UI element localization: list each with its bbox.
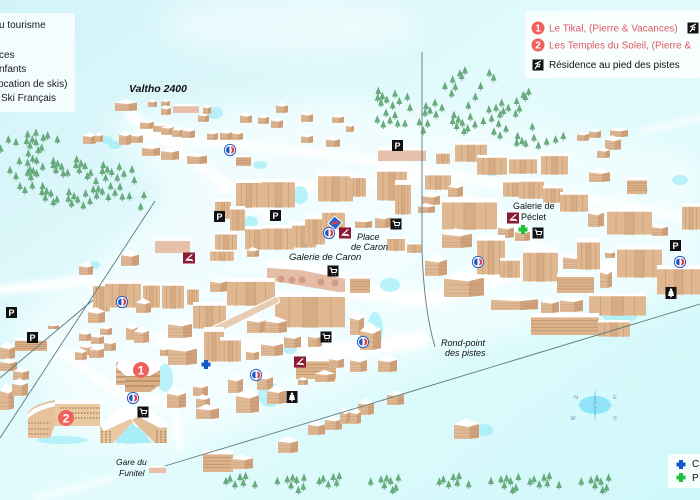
label: Galerie de Caron: Galerie de Caron <box>289 252 361 263</box>
parking icons: P <box>272 211 279 221</box>
cyan building shadows <box>37 107 688 444</box>
legend: crosses (bottom right): P <box>692 473 699 484</box>
legend: services (top left) <box>0 13 75 112</box>
compass rose: W <box>570 416 576 422</box>
buildings: Caron area <box>121 167 422 266</box>
compass rose: S <box>613 416 617 422</box>
ski runs and snow paths <box>0 115 700 498</box>
legend: residences (top right): 2 <box>535 40 541 52</box>
label: Place de Caron: de Caron <box>351 242 388 252</box>
parking icons: P <box>672 241 679 251</box>
legend: residences (top right) <box>525 11 700 78</box>
legend: crosses (bottom right) <box>668 454 700 488</box>
label: Gare du Funitel: Gare du <box>116 457 147 467</box>
walker icons <box>286 287 676 403</box>
marker 2 <box>58 410 74 426</box>
parking icons: P <box>394 141 401 151</box>
marker 2: 2 <box>63 412 70 426</box>
legend: residences (top right): Résidence au pied des pistes <box>549 60 680 71</box>
medical cross: blue <box>202 360 210 369</box>
label: Valtho 2400: Valtho 2400 <box>129 83 187 95</box>
parking icons: P <box>216 212 223 222</box>
parking icons <box>6 140 681 343</box>
compass rose <box>570 389 619 422</box>
parking icons: P <box>29 333 36 343</box>
tourist office icon <box>328 216 342 230</box>
label: Place de Caron: Place <box>357 232 380 242</box>
label: Rond-point des pistes: Rond-point <box>441 338 486 348</box>
marker 1 <box>133 362 149 378</box>
building: Galerie de Caron <box>267 258 345 293</box>
label: Galerie de Péclet: Galerie de <box>513 201 555 211</box>
compass rose: N <box>574 395 578 401</box>
legend: services (top left): Ski Français <box>1 93 56 104</box>
ski school icons <box>116 144 686 404</box>
pharmacy cross: green <box>518 225 528 234</box>
legend: services (top left): u tourisme <box>0 20 46 31</box>
marker 1: 1 <box>138 364 145 378</box>
conifer trees <box>0 66 612 495</box>
parking icons: P <box>8 308 15 318</box>
legend: crosses (bottom right): C <box>692 459 699 470</box>
buildings: central and south-west area <box>0 262 350 473</box>
shopping cart icons <box>138 218 544 418</box>
residence 2: Les Temples du Soleil building <box>28 400 168 443</box>
legend: services (top left): ocation de skis) <box>0 79 67 90</box>
legend: residences (top right): Les Temples du Soleil, (Pierre & <box>549 40 691 52</box>
residence 1: Le Tikal building <box>116 360 160 392</box>
legend: residences (top right): 1 <box>535 24 541 34</box>
buildings: Val Thorens 2400 area <box>83 99 354 166</box>
legend: residences (top right): Le Tikal, (Pierre & Vacances) <box>549 24 678 34</box>
buildings: Péclet and eastern area <box>350 127 700 439</box>
ski rental icons <box>183 212 519 368</box>
label: Rond-point des pistes: des pistes <box>445 348 486 358</box>
compass rose: E <box>613 395 617 401</box>
label: Galerie de Péclet: Péclet <box>521 212 547 222</box>
label: Gare du Funitel: Funitel <box>119 468 146 478</box>
